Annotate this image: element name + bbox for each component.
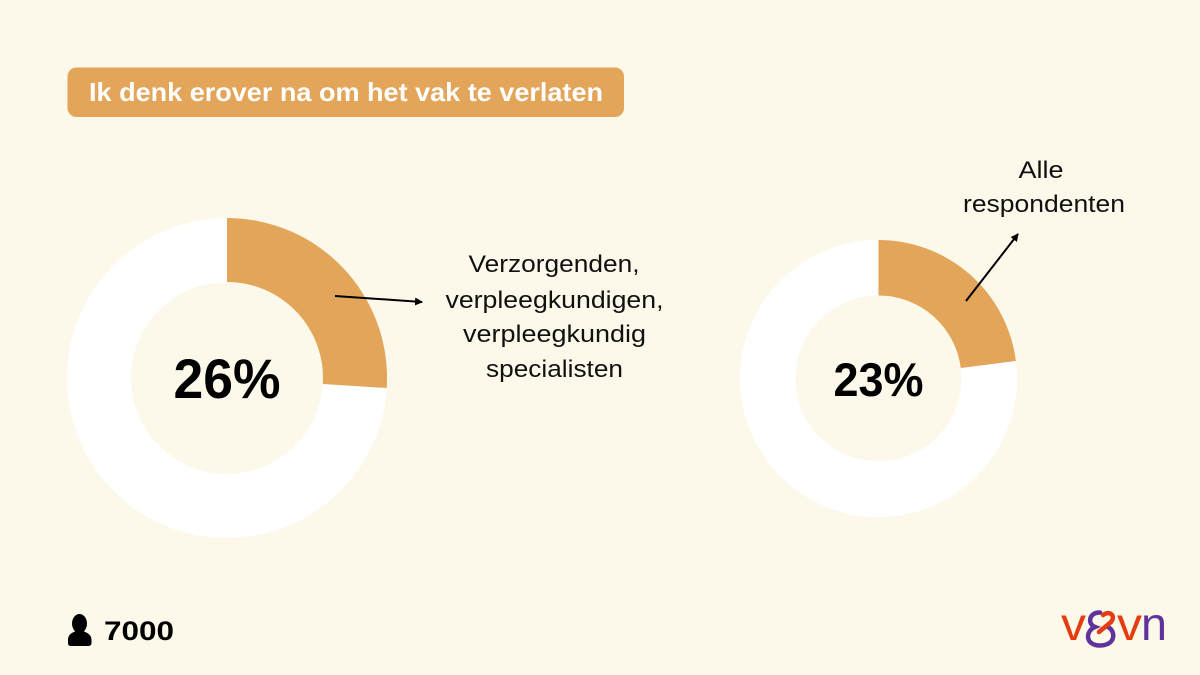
logo: v&vn: v: [1061, 598, 1086, 650]
icon: person: [68, 614, 92, 646]
label: alle respondenten: [963, 157, 1125, 218]
value: 26%: 26%: [174, 347, 280, 410]
logo: v&vn: [1061, 598, 1167, 650]
donut chart: alle respondenten 23%: [740, 240, 1017, 517]
arrow: to verzorgenden label: [335, 296, 422, 302]
label: alle respondenten: Alle: [1018, 157, 1064, 184]
label: verzorgenden: specialisten: [486, 356, 623, 383]
label: verzorgenden: Verzorgenden,: [468, 251, 640, 278]
icon: ampersand mark: [1088, 612, 1113, 646]
title: [68, 68, 624, 117]
respondents count: 7000: [104, 616, 174, 646]
arrow: to alle respondenten label: [966, 234, 1018, 301]
label: verzorgenden: [446, 251, 664, 383]
respondents count: [68, 614, 174, 646]
logo: v&vn: v: [1117, 598, 1142, 650]
title: Ik denk erover na om het vak te verlaten: [89, 77, 603, 107]
donut chart: verzorgenden 26%: [67, 218, 387, 538]
value: 23%: 23%: [834, 353, 924, 406]
label: verzorgenden: verpleegkundigen,: [446, 287, 664, 314]
logo: v&vn: n: [1141, 598, 1167, 650]
label: alle respondenten: respondenten: [963, 191, 1125, 218]
label: verzorgenden: verpleegkundig: [463, 321, 646, 348]
